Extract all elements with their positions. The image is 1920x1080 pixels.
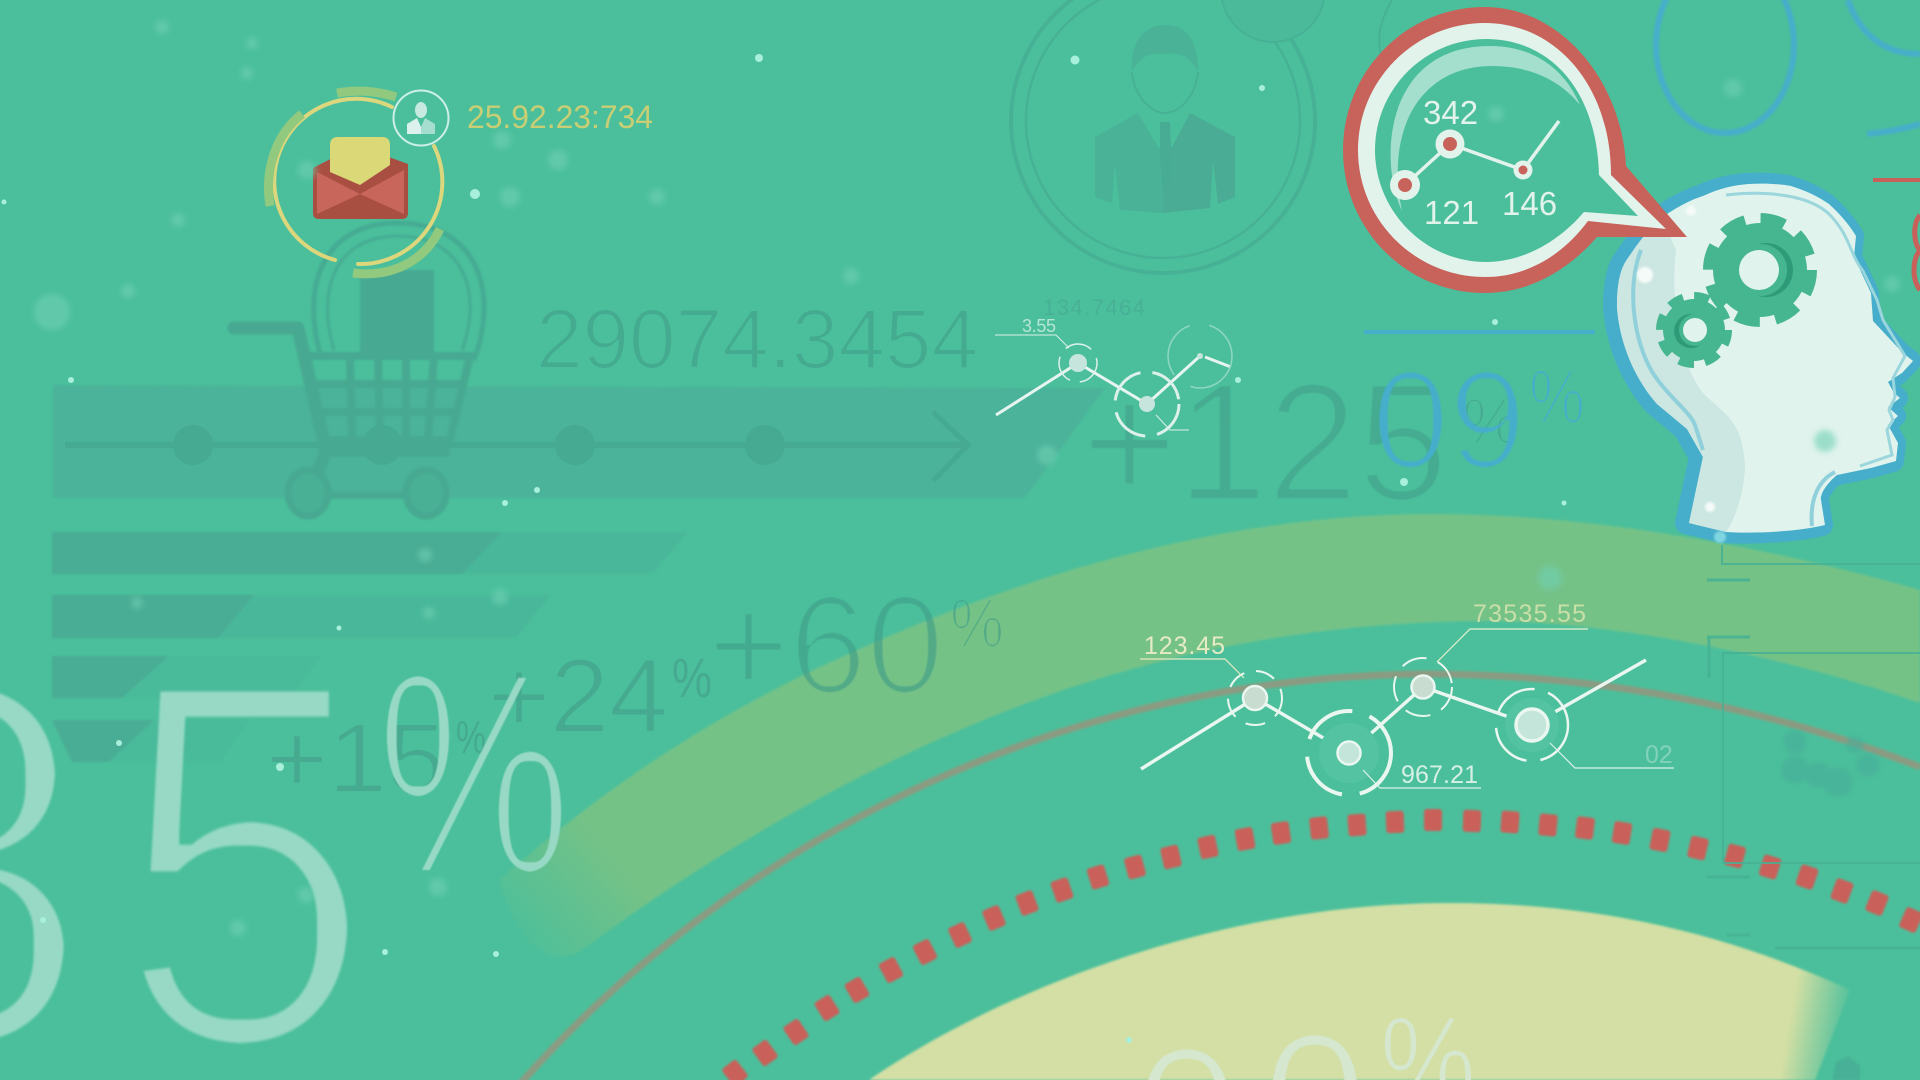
blue outline circles — [1656, 0, 1920, 134]
small gear shadow crescent — [1674, 314, 1708, 348]
head outline — [1132, 72, 1198, 113]
faint number +60%: +60 — [708, 566, 944, 723]
blue number 09%: % — [1529, 355, 1585, 440]
label 967.21 — [1363, 761, 1481, 789]
head fill — [1617, 184, 1913, 533]
text: pale percentage on yellow arc — [1134, 992, 1476, 1080]
chart values — [1423, 94, 1557, 231]
bar 2 — [52, 595, 551, 638]
user badge — [394, 90, 448, 146]
faint number +24%: +24 — [488, 638, 668, 755]
basket — [310, 356, 470, 440]
cart base — [324, 440, 450, 457]
highlight crescent — [1391, 46, 1580, 211]
contour line neck — [1812, 472, 1835, 526]
envelope back — [313, 153, 408, 219]
ring behind the cart — [314, 223, 484, 360]
green arc band — [500, 514, 1920, 957]
node 4 — [1496, 689, 1568, 761]
faint right panels — [1707, 545, 1920, 948]
cyan particle at neck — [1714, 531, 1726, 543]
main line chart — [1140, 600, 1674, 795]
chart node 3 — [1514, 160, 1532, 180]
leader lines — [995, 335, 1189, 430]
label 123.45: 123.45 — [1144, 632, 1225, 660]
node 3 — [1394, 658, 1452, 716]
cart handle and frame — [234, 328, 326, 492]
blue line above 09% — [1364, 330, 1595, 334]
thin red arc — [520, 674, 1920, 1080]
badge head — [415, 102, 427, 118]
white bubble — [1358, 23, 1666, 277]
label 3.55: 3.55 — [1022, 316, 1056, 336]
badge body — [407, 118, 421, 134]
outer green segments — [268, 91, 440, 274]
faint shopping cart icon — [234, 223, 484, 516]
faint number +15%: +15 — [266, 703, 446, 813]
chart line — [1405, 121, 1559, 185]
faint number +24%: % — [672, 646, 712, 709]
green interior — [1375, 39, 1638, 262]
faint label: 134.7464 — [1043, 295, 1145, 320]
chart values: 121 — [1424, 194, 1479, 231]
blue number 09%: 09 — [1372, 341, 1526, 498]
faint bar chart — [52, 532, 688, 762]
label 02: 02 — [1645, 741, 1673, 769]
node 1 — [1059, 344, 1097, 382]
large gear — [1710, 220, 1810, 320]
faint people group icon — [1781, 730, 1880, 797]
chart node 1 — [1390, 170, 1420, 200]
gear hole — [1739, 250, 1779, 290]
timeline line — [65, 442, 965, 448]
red dashed arc — [721, 809, 1920, 1080]
white particles on head — [1637, 206, 1715, 512]
faint number +125%: +125 — [1082, 348, 1448, 536]
contour line face — [1726, 193, 1905, 466]
red outer bubble — [1343, 7, 1687, 293]
panel tick marks — [1707, 580, 1920, 948]
timeline dots — [173, 425, 785, 465]
tie — [1160, 122, 1172, 190]
chart values: 342 — [1423, 94, 1478, 131]
node 3 — [1168, 324, 1232, 388]
faint person icon in ring — [1011, 0, 1315, 273]
percent sign: % — [376, 613, 572, 935]
node 1 — [1228, 671, 1282, 725]
faint number +15%: % — [456, 711, 486, 763]
faint icon bottom right — [1832, 1056, 1860, 1080]
gear shadow crescent — [1739, 243, 1793, 297]
head shading — [1617, 218, 1745, 532]
text: 25.92.23:734: 25.92.23:734 — [467, 99, 653, 135]
faint arc beside speech bubble — [1379, 0, 1392, 60]
line — [996, 356, 1200, 415]
cart wheels and axle — [288, 470, 446, 516]
label 123.45 — [1140, 632, 1244, 678]
small gear — [1661, 297, 1727, 363]
double ring — [1011, 0, 1315, 273]
chart values: 146 — [1502, 185, 1557, 222]
label 967.21: 967.21 — [1401, 761, 1478, 789]
red accent line and arcs at right edge — [1873, 180, 1920, 290]
envelope flaps — [317, 170, 404, 214]
envelope bottom — [318, 195, 403, 215]
label 73535.55: 73535.55 — [1473, 600, 1586, 628]
large percentage 35% — [0, 570, 572, 1080]
yellow ring — [274, 99, 442, 264]
blue outline — [1614, 184, 1910, 533]
faint number 29074.3454: 29074.3454 — [536, 292, 978, 386]
bright small particles — [2, 54, 1566, 1043]
faint number +60%: % — [950, 584, 1004, 662]
jacket right — [1163, 113, 1235, 213]
bar 3 — [52, 656, 321, 698]
line — [1141, 660, 1646, 769]
pale yellow arc segment — [869, 903, 1850, 1080]
mini line chart — [995, 295, 1232, 436]
box in cart — [360, 270, 434, 356]
speech bubble with chart — [1343, 7, 1687, 293]
letter — [330, 137, 390, 185]
bar 1 — [52, 532, 688, 574]
bar 4 — [52, 720, 250, 762]
contour line back of head — [1633, 250, 1703, 450]
faint circle top — [1221, 0, 1325, 42]
node 2 — [1115, 372, 1179, 436]
node 2 — [1307, 711, 1391, 795]
label 02 — [1550, 741, 1674, 769]
jacket left — [1095, 113, 1163, 213]
small gear hole — [1683, 318, 1707, 342]
faint number +125%: % — [1462, 385, 1519, 457]
label 73535.55 — [1437, 600, 1588, 662]
envelope badge — [268, 90, 448, 274]
hair — [1132, 25, 1198, 72]
faint timeline panel — [53, 385, 1105, 498]
chart node 2 — [1436, 130, 1464, 158]
timeline arrow — [933, 412, 968, 481]
head profile with gears — [1614, 184, 1913, 533]
